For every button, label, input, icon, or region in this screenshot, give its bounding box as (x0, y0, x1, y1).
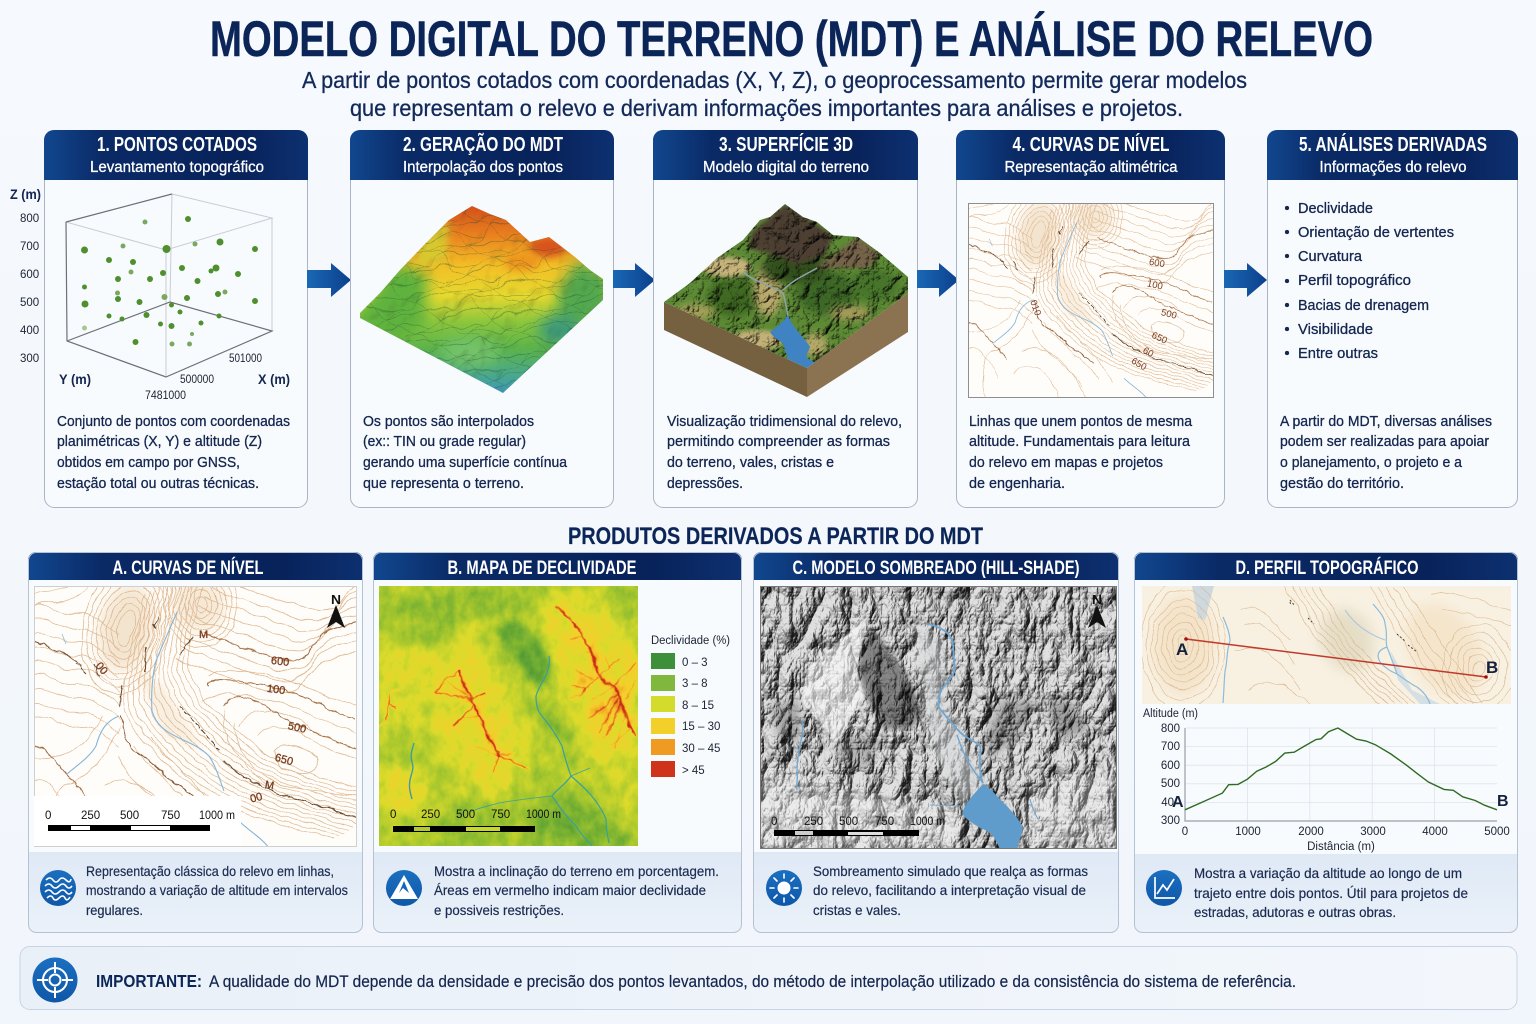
arrow 4 to 5 (1224, 263, 1267, 297)
subtitle (302, 67, 1247, 121)
legend: 0 – 3 (682, 657, 708, 669)
scale bar C: 750 (875, 816, 894, 828)
panel header 4: Representação altimétrica (1004, 159, 1178, 176)
bullet list: Perfil topográfico (1298, 272, 1411, 289)
north arrow A (327, 592, 345, 628)
description B (434, 863, 719, 918)
panel: A. curvas de nível (28, 552, 399, 933)
band A (28, 852, 363, 933)
header C: C. MODELO SOMBREADO (HILL-SHADE) (792, 558, 1080, 579)
legend (651, 635, 730, 777)
panel: 3. superfície 3D (653, 130, 918, 508)
scale bar C: 0 (771, 816, 777, 828)
description C: Sombreamento simulado que realça as formas (813, 863, 1088, 879)
contour map A: 00 (93, 660, 110, 677)
contour map: 100 (1146, 278, 1164, 293)
description 5: o planejamento, o projeto e a (1280, 454, 1463, 471)
panel header 3 (653, 130, 918, 180)
description 3 (667, 413, 902, 492)
description 2 (363, 413, 568, 492)
TIN surface model (360, 206, 603, 393)
panel: 2. geração do MDT (330, 130, 620, 508)
panel: B. mapa de declividade (373, 552, 742, 933)
3D point cloud chart: Z (m) (10, 187, 41, 202)
icon: line chart (1146, 870, 1182, 906)
altitude profile chart: 1000 (1235, 826, 1261, 838)
header B: B. MAPA DE DECLIVIDADE (448, 558, 636, 579)
callout: importante: IMPORTANTE: (96, 971, 202, 991)
contour map: 650 (1150, 330, 1169, 347)
band C (753, 852, 1119, 933)
panel header 4 (956, 130, 1225, 180)
subtitle: A partir de pontos cotados com coordenadas (X, Y, Z), o geoprocessamento permite gerar modelos (302, 67, 1247, 93)
altitude profile chart: 800 (1161, 723, 1180, 735)
description B: Mostra a inclinação do terreno em porcentagem. (434, 863, 719, 879)
subtitle: que representam o relevo e derivam informações importantes para análises e projetos. (350, 95, 1183, 121)
slope map (378, 586, 640, 850)
3D point cloud chart: 501000 (229, 353, 262, 365)
scale bar C: 1000 m (910, 816, 945, 828)
panel: C. modelo sombreado (753, 552, 1119, 933)
legend: Declividade (%) (651, 635, 730, 647)
altitude profile chart: 300 (1161, 815, 1180, 827)
icon: sun (766, 870, 802, 906)
description 2: (ex:: TIN ou grade regular) (363, 433, 526, 450)
contour map (964, 179, 1246, 401)
legend: 8 – 15 (682, 700, 714, 712)
description 4: altitude. Fundamentais para leitura (969, 433, 1191, 450)
description C (813, 863, 1088, 918)
description 2: que representa o terreno. (363, 475, 524, 492)
callout: importante: A qualidade do MDT depende da densidade e precisão dos pontos levantados, do método de interpolação utilizado e da consistência do sistema de referência. (209, 972, 1296, 991)
bullet list: Curvatura (1298, 248, 1363, 265)
profile location map (1142, 586, 1511, 704)
panel: 4. curvas de nível (956, 130, 1246, 508)
north arrow C (1088, 592, 1106, 628)
header A (28, 552, 363, 580)
description 1: planimétricas (X, Y) e altitude (Z) (57, 433, 262, 450)
description C: do relevo, facilitando a interpretação visual de (813, 882, 1086, 898)
legend: 30 – 45 (682, 743, 720, 755)
altitude profile chart (1143, 708, 1510, 853)
panel: 1. pontos cotados (10, 130, 308, 508)
north arrow C: N (1092, 592, 1102, 607)
profile line A-B (1176, 637, 1498, 679)
description D: estradas, adutoras e outras obras. (1194, 904, 1396, 920)
panel header 2 (350, 130, 614, 180)
scale bar C (771, 816, 945, 836)
altitude profile chart: 500 (1161, 778, 1180, 790)
icon: target (32, 958, 78, 1002)
panel: D. perfil topográfico (1134, 552, 1518, 933)
contour map: 010 (1027, 299, 1043, 317)
contour map A: M (199, 629, 208, 641)
icon: waves (40, 870, 76, 906)
scale bar B: 1000 m (526, 809, 561, 821)
header D: D. PERFIL TOPOGRÁFICO (1236, 557, 1418, 579)
description 3: depressões. (667, 475, 743, 492)
3D point cloud chart: 300 (20, 353, 39, 365)
scale bar B: 250 (421, 809, 440, 821)
scale bar A: 750 (161, 810, 180, 822)
altitude profile chart: 40 (1161, 797, 1174, 809)
description 2: Os pontos são interpolados (363, 413, 534, 430)
description A (86, 863, 348, 918)
3D terrain block (660, 200, 910, 397)
scale bar B: 750 (491, 809, 510, 821)
bullet list: Bacias de drenagem (1298, 297, 1429, 314)
arrow 2 to 3 (613, 263, 655, 297)
panel header 4: 4. CURVAS DE NÍVEL (1012, 133, 1170, 156)
band B (373, 852, 742, 933)
description 5: podem ser realizadas para apoiar (1280, 433, 1489, 450)
altitude profile chart: B (1497, 793, 1509, 810)
contour map: 600 (1148, 257, 1166, 270)
panel header 1: 1. PONTOS COTADOS (97, 134, 257, 156)
description 1 (57, 413, 290, 492)
contour map A: 600 (270, 655, 290, 669)
description A: regulares. (86, 902, 143, 918)
legend: > 45 (682, 765, 705, 777)
contour map A: M (264, 779, 275, 792)
panel: 5. análises derivadas (1267, 130, 1518, 508)
3D point cloud chart: 500 (20, 297, 39, 309)
altitude profile chart: 3000 (1360, 826, 1386, 838)
bullet list: Visibilidade (1298, 321, 1373, 338)
altitude profile chart: 5000 (1484, 826, 1510, 838)
arrow 3 to 4 (917, 263, 959, 297)
altitude profile chart: 0 (1182, 826, 1188, 838)
description 4 (969, 413, 1193, 492)
scale bar B (390, 809, 561, 832)
altitude profile chart: 600 (1161, 760, 1180, 772)
scale bar A: 250 (81, 810, 100, 822)
header D (1134, 552, 1518, 580)
3D point cloud chart: 7481000 (145, 390, 186, 402)
description 3: Visualização tridimensional do relevo, (667, 413, 902, 430)
description 4: do relevo em mapas e projetos (969, 454, 1163, 471)
description 4: Linhas que unem pontos de mesma (969, 413, 1193, 430)
scale bar A: 500 (120, 810, 139, 822)
description A: mostrando a variação de altitude em intervalos (86, 882, 348, 898)
contour map: 650 (1129, 356, 1148, 373)
bullet list (1285, 200, 1454, 362)
description B: e possiveis restrições. (434, 902, 564, 918)
altitude profile chart: 700 (1161, 741, 1180, 753)
description 2: gerando uma superfície contínua (363, 454, 568, 471)
contour map A: 00 (249, 791, 264, 806)
panel header 3: 3. SUPERFÍCIE 3D (719, 133, 853, 156)
description 3: permitindo compreender as formas (667, 433, 890, 450)
scale bar A: 0 (45, 810, 51, 822)
3D point cloud chart: Y (m) (59, 372, 91, 387)
altitude profile chart: 4000 (1422, 826, 1448, 838)
description 5: A partir do MDT, diversas análises (1280, 413, 1492, 430)
description 4: de engenharia. (969, 475, 1065, 492)
header A: A. CURVAS DE NÍVEL (112, 557, 264, 579)
icon: mountain (386, 870, 422, 906)
3D point cloud chart: 400 (20, 325, 39, 337)
callout: importante (20, 946, 1517, 1010)
contour map: 60 (1141, 345, 1155, 360)
scale bar A: 1000 m (199, 810, 235, 822)
contour map A: 650 (273, 752, 294, 768)
hillshade map (760, 586, 1117, 849)
panel header 1 (44, 130, 308, 180)
description 1: estação total ou outras técnicas. (57, 475, 259, 492)
contour map A: 500 (287, 720, 307, 736)
altitude profile chart: Distância (m) (1307, 841, 1375, 853)
bullet list: Orientação de vertentes (1298, 224, 1454, 241)
description 3: do terreno, vales, cristas e (667, 454, 834, 471)
profile line A-B: B (1486, 658, 1498, 677)
description D (1194, 865, 1468, 920)
panel header 3: Modelo digital do terreno (703, 159, 869, 176)
bullet list: Entre outras (1298, 345, 1378, 362)
description B: Áreas em vermelho indicam maior declividade (434, 882, 706, 898)
scale bar A (34, 796, 241, 846)
description 1: Conjunto de pontos com coordenadas (57, 413, 290, 430)
3D point cloud chart: 600 (20, 269, 39, 281)
description 5 (1280, 413, 1492, 492)
description C: cristas e vales. (813, 902, 901, 918)
bullet list: Declividade (1298, 200, 1373, 217)
altitude profile chart: 2000 (1298, 826, 1324, 838)
panel header 5: Informações do relevo (1320, 159, 1466, 176)
description D: trajeto entre dois pontos. Útil para projetos de (1194, 885, 1468, 901)
3D point cloud chart: 800 (20, 213, 39, 225)
header B (373, 552, 742, 580)
description 5: gestão do território. (1280, 475, 1404, 492)
3D point cloud chart: X (m) (258, 372, 290, 387)
panel header 2: 2. GERAÇÃO DO MDT (403, 133, 563, 156)
altitude profile chart: Altitude (m) (1143, 708, 1198, 720)
contour map A: 100 (266, 683, 286, 697)
contour map: 500 (1160, 307, 1178, 322)
scale bar B: 0 (390, 809, 396, 821)
3D point cloud chart: 500000 (180, 374, 214, 386)
description D: Mostra a variação da altitude ao longo de um (1194, 865, 1462, 881)
panel header 1: Levantamento topográfico (90, 159, 264, 176)
legend: 3 – 8 (682, 678, 708, 690)
header C (753, 552, 1119, 580)
3D point cloud chart: 700 (20, 241, 39, 253)
band D (1134, 854, 1518, 933)
contour map A (29, 554, 399, 851)
3D point cloud chart (10, 187, 290, 402)
scale bar C: 250 (804, 816, 823, 828)
altitude profile chart: A (1172, 794, 1184, 811)
description 1: obtidos em campo por GNSS, (57, 454, 240, 471)
panel header 5 (1267, 130, 1518, 180)
section heading: PRODUTOS DERIVADOS A PARTIR DO MDT (568, 523, 983, 550)
panel header 2: Interpolação dos pontos (403, 159, 563, 176)
scale bar C: 500 (839, 816, 858, 828)
scale bar B: 500 (456, 809, 475, 821)
north arrow A: N (331, 592, 341, 607)
legend: 15 – 30 (682, 721, 720, 733)
description A: Representação clássica do relevo em linhas, (86, 863, 334, 879)
arrow 1 to 2 (307, 263, 351, 297)
profile line A-B: A (1176, 640, 1188, 659)
